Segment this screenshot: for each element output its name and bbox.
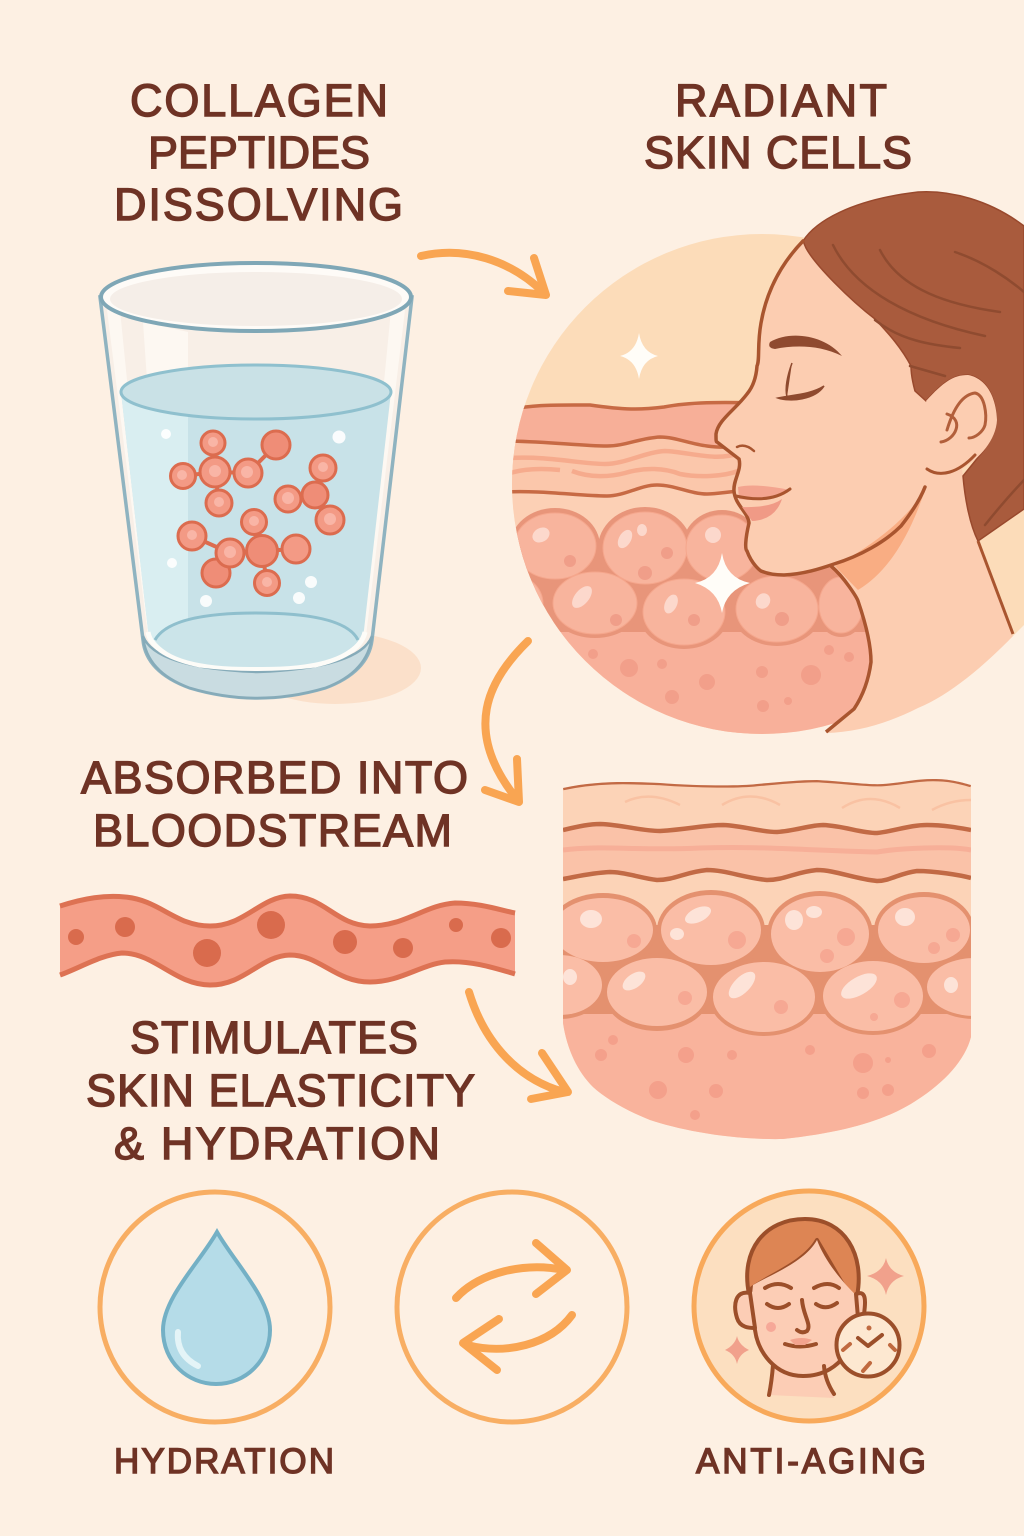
face and neck: [716, 230, 1013, 733]
interstitial tissue: [560, 925, 975, 1014]
heading: radiant skin cells: RADIANT: [675, 75, 887, 126]
heading: stimulates skin elasticity and hydration: & HYDRATION: [114, 1118, 440, 1169]
skin layer lines: [563, 779, 971, 881]
heading: collagen peptides dissolving: DISSOLVING: [114, 179, 403, 230]
glass inner wall: [107, 310, 405, 636]
ears: [735, 1293, 865, 1328]
nostril: [737, 446, 754, 451]
heading: stimulates skin elasticity and hydration: [86, 1012, 475, 1169]
ear: [926, 375, 997, 474]
middle skin layer: [563, 824, 971, 881]
arrow: face to bloodstream: [485, 641, 528, 802]
sparkle: small: [620, 333, 658, 379]
heading: collagen peptides dissolving: PEPTIDES: [148, 127, 370, 178]
icon: anti-aging face and clock: [694, 1191, 924, 1421]
illustration: skin cross-section: [563, 779, 971, 1140]
arrow: bloodstream to skin: [469, 992, 568, 1099]
label: hydration: HYDRATION: [114, 1442, 334, 1481]
interstitial and cells: [505, 546, 885, 632]
glass highlight: [143, 322, 188, 640]
arrow: glass to face: [421, 253, 546, 295]
clock: [836, 1314, 900, 1376]
closed eye: [778, 363, 824, 400]
blood cells: [68, 911, 511, 967]
face outline and features: [755, 1284, 845, 1395]
heading: stimulates skin elasticity and hydration: STIMULATES: [130, 1012, 418, 1063]
outlines: [716, 241, 925, 575]
dermis: [552, 620, 870, 734]
heading: collagen peptides dissolving: [114, 75, 403, 230]
peptide molecules: [170, 431, 344, 596]
eyebrow: [769, 336, 842, 356]
sparkles: [867, 1258, 904, 1295]
illustration: blood vessel: [60, 896, 515, 985]
dermis: [563, 1014, 971, 1140]
label: anti-aging: ANTI-AGING: [696, 1442, 926, 1481]
heading: stimulates skin elasticity and hydration: SKIN ELASTICITY: [86, 1065, 475, 1116]
heading: radiant skin cells: SKIN CELLS: [644, 127, 912, 178]
face: [752, 1240, 862, 1376]
illustration: glass of water with collagen peptides: [100, 263, 421, 704]
glass body: [100, 297, 412, 698]
neck: [769, 1365, 834, 1398]
back of shoulder: [975, 505, 1024, 636]
cell highlights: [563, 903, 958, 1004]
neck shadow: [835, 490, 925, 590]
icon: hydration water drop: [100, 1192, 330, 1422]
heading: absorbed into bloodstream: BLOODSTREAM: [93, 805, 452, 856]
hair: [747, 1219, 859, 1298]
heading: absorbed into bloodstream: ABSORBED INTO: [81, 752, 468, 803]
cells: [563, 895, 971, 1032]
heading: absorbed into bloodstream: [81, 752, 468, 856]
sparkle: large: [695, 553, 750, 613]
heading: radiant skin cells: [644, 75, 912, 178]
water: [121, 392, 391, 666]
hair: [803, 192, 1024, 541]
glass rim: [101, 263, 411, 331]
bubbles: [161, 429, 346, 607]
icon: renewal cycle arrows: [397, 1192, 627, 1422]
lips: [738, 486, 790, 500]
heading: collagen peptides dissolving: COLLAGEN: [130, 75, 388, 126]
skin layers: [512, 487, 745, 538]
illustration: profile face with skin cross-section: [512, 191, 1024, 734]
glass base: [143, 636, 372, 698]
